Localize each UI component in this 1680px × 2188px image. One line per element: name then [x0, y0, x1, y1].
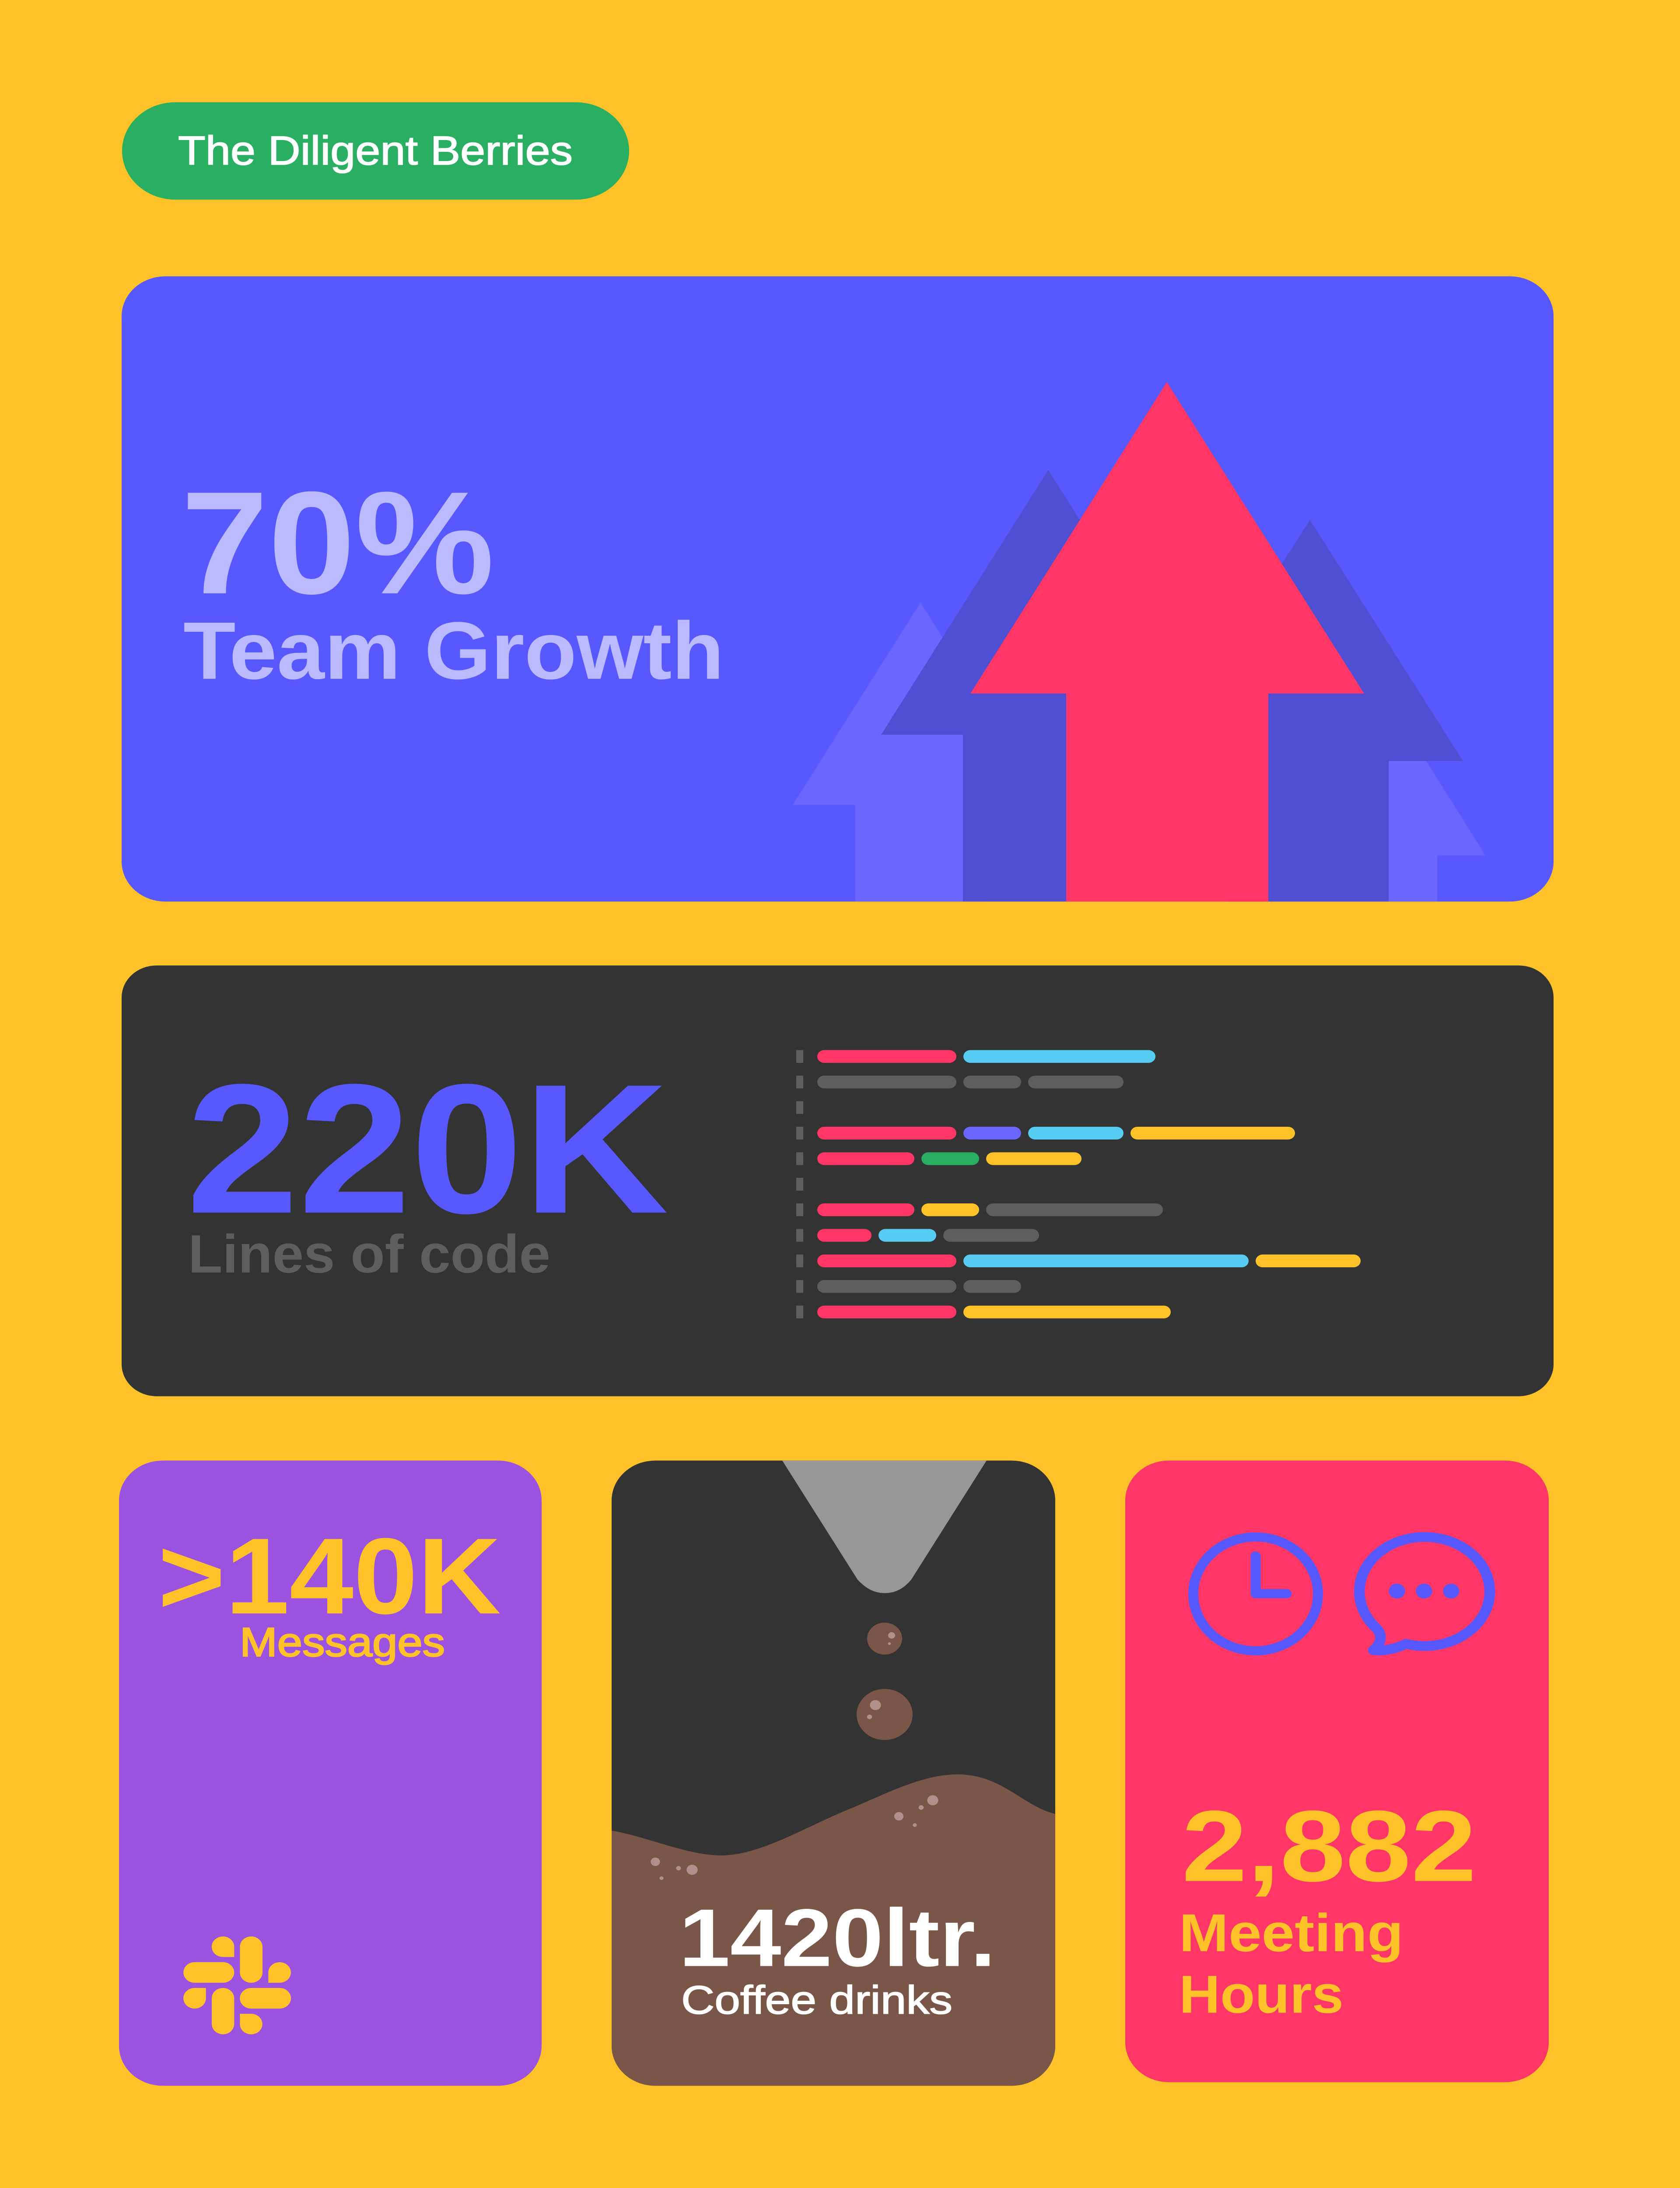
label: lines of code: Lines of code [188, 1224, 550, 1284]
chart: code lines illustration [796, 1050, 1361, 1318]
stat: 220K: 220K [186, 1046, 668, 1252]
panel: team growth [122, 276, 1554, 901]
badge: team name: The Diligent Berries [178, 128, 573, 173]
illustration: coffee surface [612, 1774, 1055, 2086]
icon: small coffee drop [867, 1623, 902, 1655]
panel: coffee [612, 1461, 1055, 2086]
label: team growth: Team Growth [183, 605, 724, 696]
icon: clock [1194, 1537, 1318, 1651]
label: hours: Hours [1179, 1965, 1344, 2024]
badge: team name [122, 102, 629, 200]
label: meeting: Meeting [1179, 1903, 1404, 1963]
icon: growth arrows [793, 382, 1485, 901]
stat: 1420ltr.: 1420ltr. [679, 1892, 996, 1984]
label: messages: Messages [240, 1620, 445, 1665]
icon: large coffee drop [857, 1689, 913, 1740]
panel: meeting hours [1125, 1461, 1549, 2082]
label: coffee drinks: Coffee drinks [681, 1978, 952, 2022]
icon: coffee funnel [782, 1461, 987, 1593]
stat: >140K: >140K [158, 1515, 501, 1636]
panel: messages [119, 1461, 542, 2086]
stat: 70%: 70% [181, 462, 494, 624]
stat: 2,882: 2,882 [1182, 1790, 1477, 1903]
panel: lines of code [122, 965, 1554, 1396]
icon: slack logo [183, 1936, 291, 2034]
icon: chat bubble [1359, 1537, 1490, 1651]
